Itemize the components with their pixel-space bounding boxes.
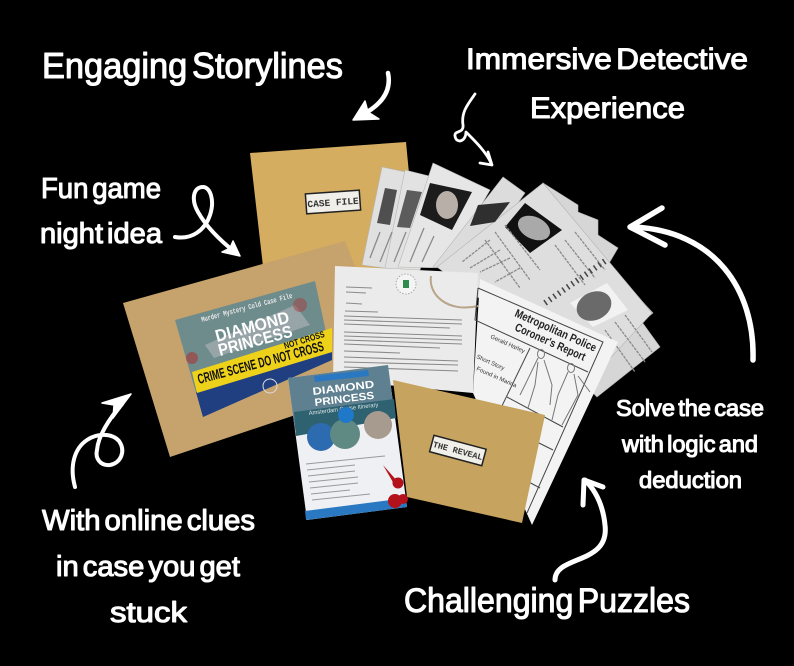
arrow: storylines to case file xyxy=(353,73,389,120)
report frame and table xyxy=(475,288,603,513)
handwritten notes: Found in Marina xyxy=(475,366,518,390)
coffee ring stain xyxy=(431,276,478,308)
heading: Engaging Storylines: Engaging Storylines xyxy=(42,45,343,86)
arrow: looped to envelope xyxy=(175,187,240,256)
arrow: curve to coroner's report xyxy=(555,480,605,580)
coroner's report: Coroner's Report xyxy=(513,322,587,364)
handwritten notes: Gerald Harley xyxy=(489,334,525,355)
envelope: main cold case file xyxy=(123,241,400,457)
envelope: case file xyxy=(250,142,421,310)
label: the reveal xyxy=(430,435,486,466)
flyer: Amsterdam cruise itinerary: DIAMOND xyxy=(312,378,375,398)
heading: Immersive Detective Experience xyxy=(466,43,748,125)
arrow: looped to main envelope xyxy=(73,394,131,487)
heading: Solve the case: Solve the case xyxy=(616,395,764,421)
handwritten notes xyxy=(475,334,525,390)
case file cover label: NOT CROSS xyxy=(283,329,326,351)
arrow: large curve to sheets xyxy=(630,208,753,360)
heading: Solve the case: with logic and xyxy=(621,431,758,457)
coroner's report xyxy=(473,279,618,525)
logo: green crest xyxy=(396,274,416,294)
case file cover label: CRIME SCENE DO NOT CROSS xyxy=(196,338,325,387)
heading: Solve the case xyxy=(616,395,764,493)
heading: With online clues: stuck xyxy=(110,597,188,629)
case file cover label: DIAMOND xyxy=(213,308,291,346)
photos on sheets xyxy=(377,183,628,327)
heading: Immersive Detective Experience: Immersive Detective xyxy=(466,43,748,76)
heading: Challenging Puzzles: Challenging Puzzles xyxy=(404,582,690,620)
heading: Fun game night idea: Fun game xyxy=(41,173,161,205)
letter xyxy=(333,266,478,393)
flyer: Amsterdam cruise itinerary: Amsterdam Cruise Itinerary xyxy=(309,402,379,417)
case file cover label xyxy=(175,281,332,417)
handwritten notes: Short Story xyxy=(475,354,505,372)
heading: Immersive Detective Experience: Experience xyxy=(530,92,685,125)
heading: Fun game night idea xyxy=(40,173,163,250)
character sheets fan xyxy=(362,163,660,397)
letter text lines xyxy=(344,287,462,371)
flyer: Amsterdam cruise itinerary: PRINCESS xyxy=(314,390,375,409)
heading: With online clues: in case you get xyxy=(56,551,240,583)
label: case file xyxy=(305,190,361,214)
heading: Solve the case: deduction xyxy=(639,467,742,493)
label: case file: CASE FILE xyxy=(307,196,359,210)
flyer: Amsterdam cruise itinerary xyxy=(288,365,408,520)
label: the reveal: THE REVEAL xyxy=(432,440,484,463)
heading: With online clues xyxy=(42,505,255,629)
sheet text lines xyxy=(370,225,652,372)
case file cover label: Murder Mystery Cold Case File xyxy=(201,293,294,325)
coroner's report: Metropolitan Police xyxy=(513,308,598,355)
body outline diagram xyxy=(520,350,590,425)
envelope: the reveal xyxy=(393,380,545,523)
blood splatter xyxy=(383,465,408,508)
case file cover label: PRINCESS xyxy=(216,322,294,360)
heading: Fun game night idea: night idea xyxy=(40,218,163,250)
heading: With online clues: With online clues xyxy=(42,505,255,537)
arrow: looped to sheets xyxy=(455,94,492,165)
